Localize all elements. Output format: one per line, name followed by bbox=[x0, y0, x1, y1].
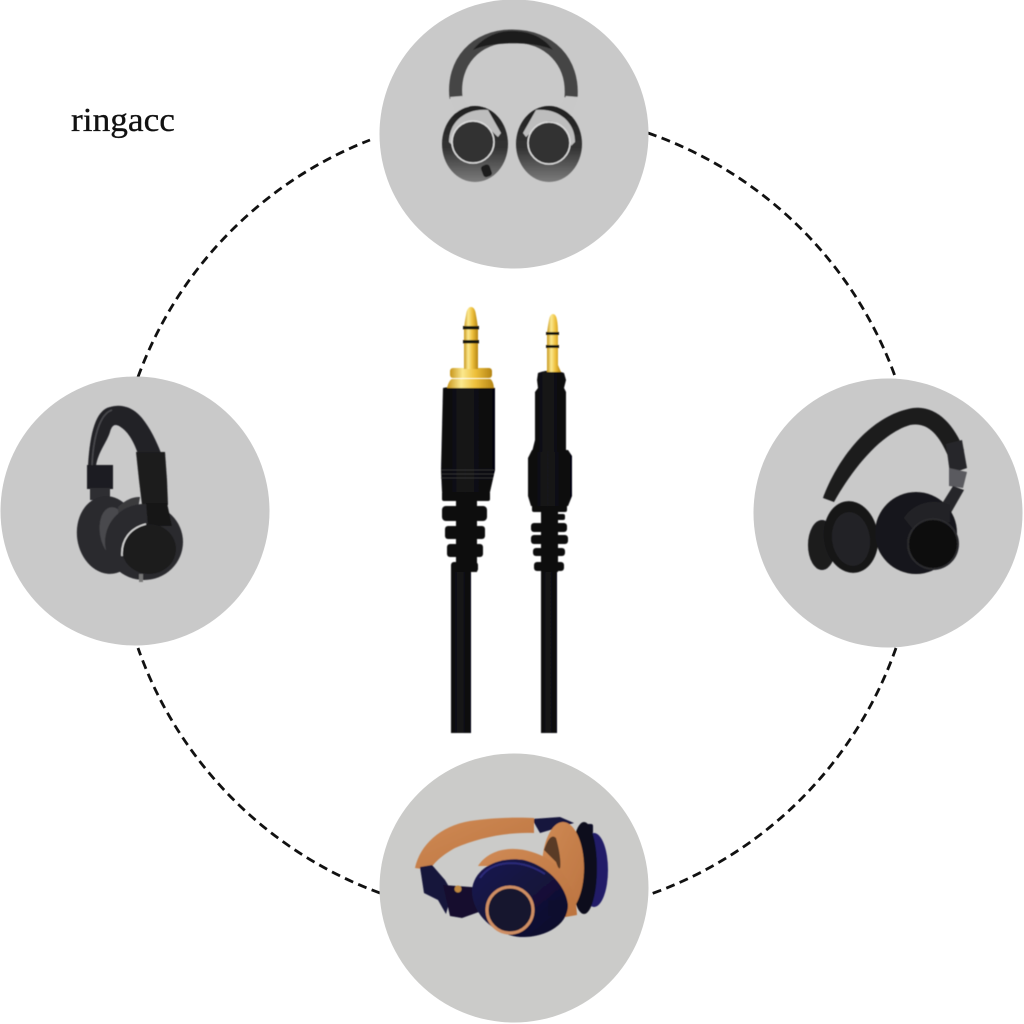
icon: silver and black over-ear headphones bbox=[442, 31, 582, 182]
wide grip bbox=[528, 450, 572, 506]
gold pin bbox=[547, 314, 561, 372]
panel: bottom headphone circle bbox=[380, 754, 648, 1022]
dashed ring connecting the four headphones bbox=[138, 133, 896, 895]
brand name: ringacc bbox=[71, 102, 175, 139]
body bbox=[441, 386, 495, 492]
panel: top headphone circle bbox=[380, 0, 648, 268]
illustration: left 3.5mm plug and cable bbox=[441, 307, 495, 733]
strain relief bbox=[442, 490, 490, 572]
icon: black DJ headphones bbox=[808, 408, 967, 576]
icon: orange and navy headphones bbox=[415, 817, 608, 937]
cable bbox=[451, 565, 471, 733]
gold pin bbox=[464, 307, 478, 369]
strain relief bbox=[531, 500, 568, 572]
slim body and cap bbox=[532, 370, 568, 452]
gold collar bbox=[447, 379, 494, 388]
illustration: right 2.5mm plug and cable bbox=[528, 314, 572, 733]
panel: right headphone circle bbox=[754, 378, 1022, 648]
cable bbox=[541, 570, 557, 733]
icon: black studio headphones bbox=[72, 406, 183, 582]
panel: left headphone circle bbox=[0, 376, 270, 646]
